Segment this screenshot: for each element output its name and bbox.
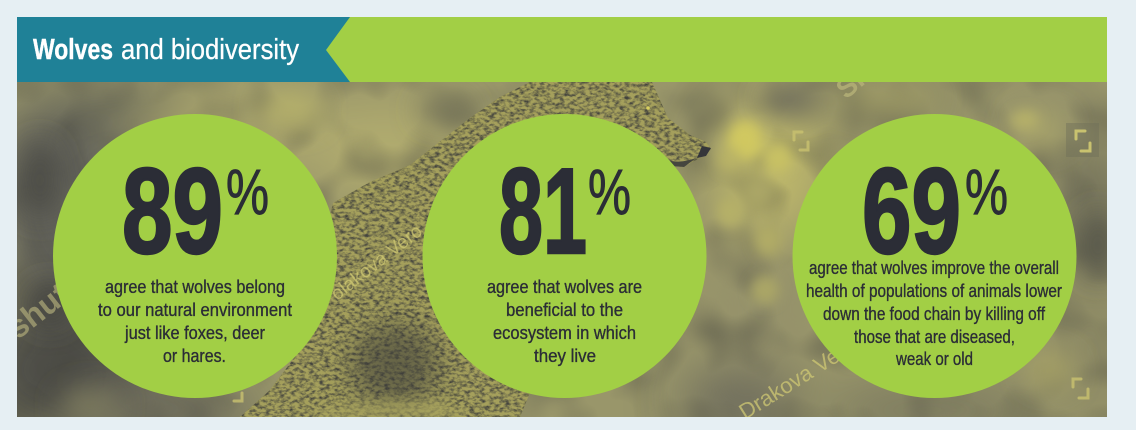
panel: wolf photo background xyxy=(17,82,1107,417)
description: they live xyxy=(534,345,596,366)
number 89: 89 xyxy=(122,143,223,279)
wolf silhouette xyxy=(240,82,711,417)
description: just like foxes, deer xyxy=(124,322,265,343)
percent sign: % xyxy=(965,156,1008,228)
description xyxy=(487,276,642,366)
description: ecosystem in which xyxy=(493,322,636,343)
percent sign: % xyxy=(226,156,269,228)
description: agree that wolves belong xyxy=(105,276,285,297)
icons: watermark corner brackets xyxy=(234,123,1099,401)
number 81: 81 xyxy=(499,143,587,279)
description: beneficial to the xyxy=(506,299,623,320)
description: to our natural environment xyxy=(98,299,292,320)
description: weak or old xyxy=(895,348,973,369)
low-frequency blotches xyxy=(17,82,1107,417)
watermark text: olakova Vero xyxy=(327,221,427,305)
description: down the food chain by killing off xyxy=(823,303,1046,324)
watermark text: Drakova Vero xyxy=(734,332,861,424)
header band xyxy=(17,17,1107,82)
watermark text: shut xyxy=(0,275,76,346)
description: agree that wolves are xyxy=(487,276,642,297)
description xyxy=(98,276,292,366)
description: those that are diseased, xyxy=(854,326,1015,347)
watermark text xyxy=(17,82,864,417)
description: agree that wolves improve the overall xyxy=(809,257,1059,278)
title: Wolves xyxy=(33,34,113,66)
title xyxy=(33,34,299,66)
panel: statistic 89% xyxy=(53,114,337,398)
panel: statistic 81% xyxy=(422,114,706,398)
title ribbon xyxy=(17,17,350,82)
description: or hares. xyxy=(163,345,226,366)
description xyxy=(806,257,1062,369)
watermark text: Sh xyxy=(830,58,877,105)
percent sign: % xyxy=(588,156,631,228)
number 69: 69 xyxy=(862,143,961,279)
description: health of populations of animals lower xyxy=(806,280,1062,301)
panel: statistic 69% xyxy=(792,114,1076,398)
title: and biodiversity xyxy=(121,34,299,66)
